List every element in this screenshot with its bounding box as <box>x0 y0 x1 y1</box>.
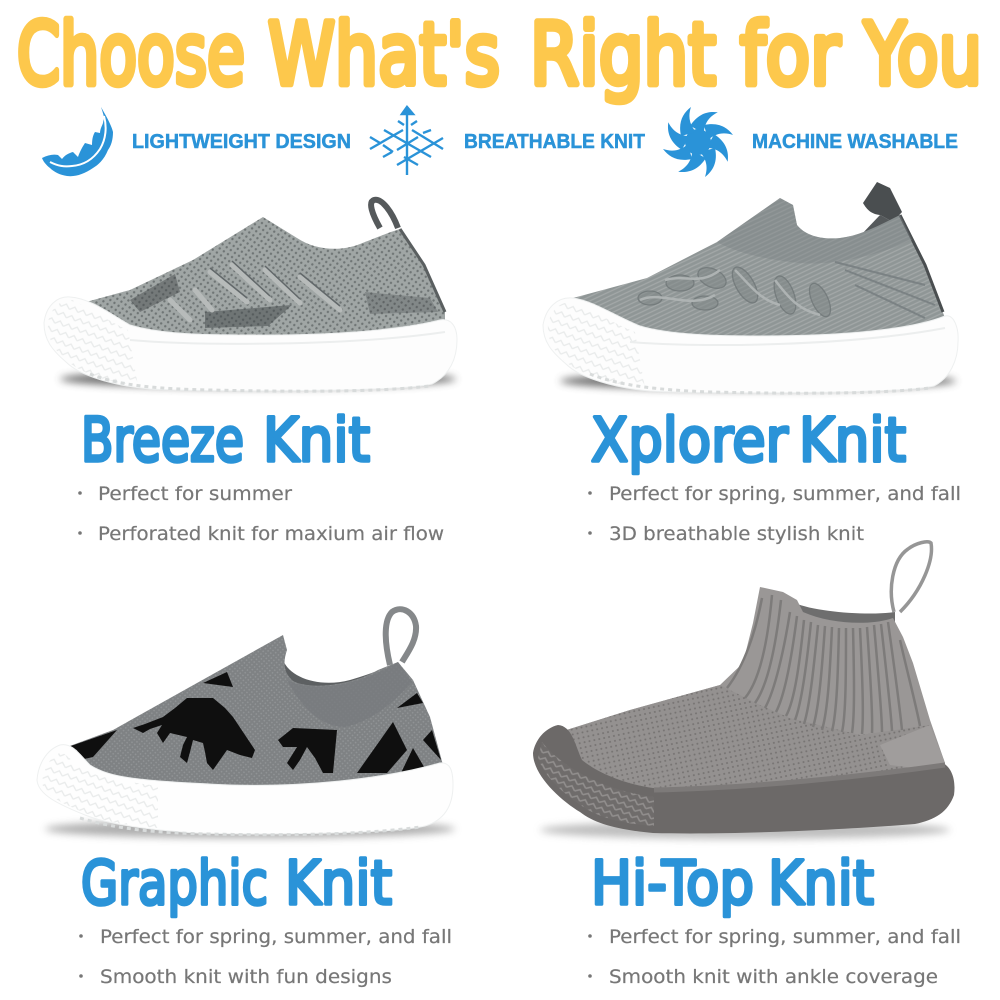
shoe: breeze knit <box>44 200 457 391</box>
bullet list: hi-top knit: Smooth knit with ankle coverage <box>609 966 938 988</box>
heading: hi-top knit: Hi-Top <box>591 848 754 919</box>
title <box>17 5 982 105</box>
bullet list: xplorer knit <box>588 483 961 545</box>
icon: breathable knit <box>370 107 443 175</box>
title: for <box>740 5 841 105</box>
panel: xplorer knit <box>543 182 961 545</box>
bullet list: breeze knit: Perforated knit for maxium air flow <box>98 523 444 545</box>
bullet list: graphic knit: Smooth knit with fun designs <box>100 966 392 988</box>
heading: xplorer knit: Xplorer <box>591 405 789 476</box>
shoe: xplorer knit <box>543 182 958 393</box>
shoe: hi-top knit <box>533 542 955 839</box>
shoe: graphic knit <box>37 609 455 838</box>
bullet list: graphic knit: Perfect for spring, summer, and fall <box>100 926 452 948</box>
feature label: lightweight design: LIGHTWEIGHT DESIGN <box>132 131 351 153</box>
icon: machine washable swirl <box>661 105 735 179</box>
bullet list: xplorer knit: Perfect for spring, summer, and fall <box>609 483 961 505</box>
heading: hi-top knit <box>591 848 874 919</box>
heading: xplorer knit: Knit <box>799 405 906 476</box>
bullet list: hi-top knit <box>588 926 961 988</box>
icon: feather <box>42 107 113 176</box>
heading: graphic knit: Knit <box>285 848 392 919</box>
title: Right <box>530 5 716 105</box>
heading: breeze knit: Knit <box>263 405 370 476</box>
bullet list: breeze knit <box>78 483 444 545</box>
heading: breeze knit: Breeze <box>81 405 244 476</box>
title: What's <box>268 5 500 105</box>
bullet list: breeze knit: Perfect for summer <box>98 483 292 505</box>
panel: hi-top knit <box>533 542 961 988</box>
panel: graphic knit <box>37 609 455 988</box>
bullet list: xplorer knit: 3D breathable stylish knit <box>609 523 864 545</box>
heading: graphic knit: Graphic <box>81 848 268 919</box>
panel: breeze knit <box>44 200 457 545</box>
feature label: machine washable: MACHINE WASHABLE <box>752 131 958 153</box>
bullet list: hi-top knit: Perfect for spring, summer, and fall <box>609 926 961 948</box>
bullet list: graphic knit <box>79 926 452 988</box>
heading: hi-top knit: Knit <box>768 848 874 919</box>
title: Choose <box>17 5 245 105</box>
feature label: breathable knit: BREATHABLE KNIT <box>464 131 645 153</box>
